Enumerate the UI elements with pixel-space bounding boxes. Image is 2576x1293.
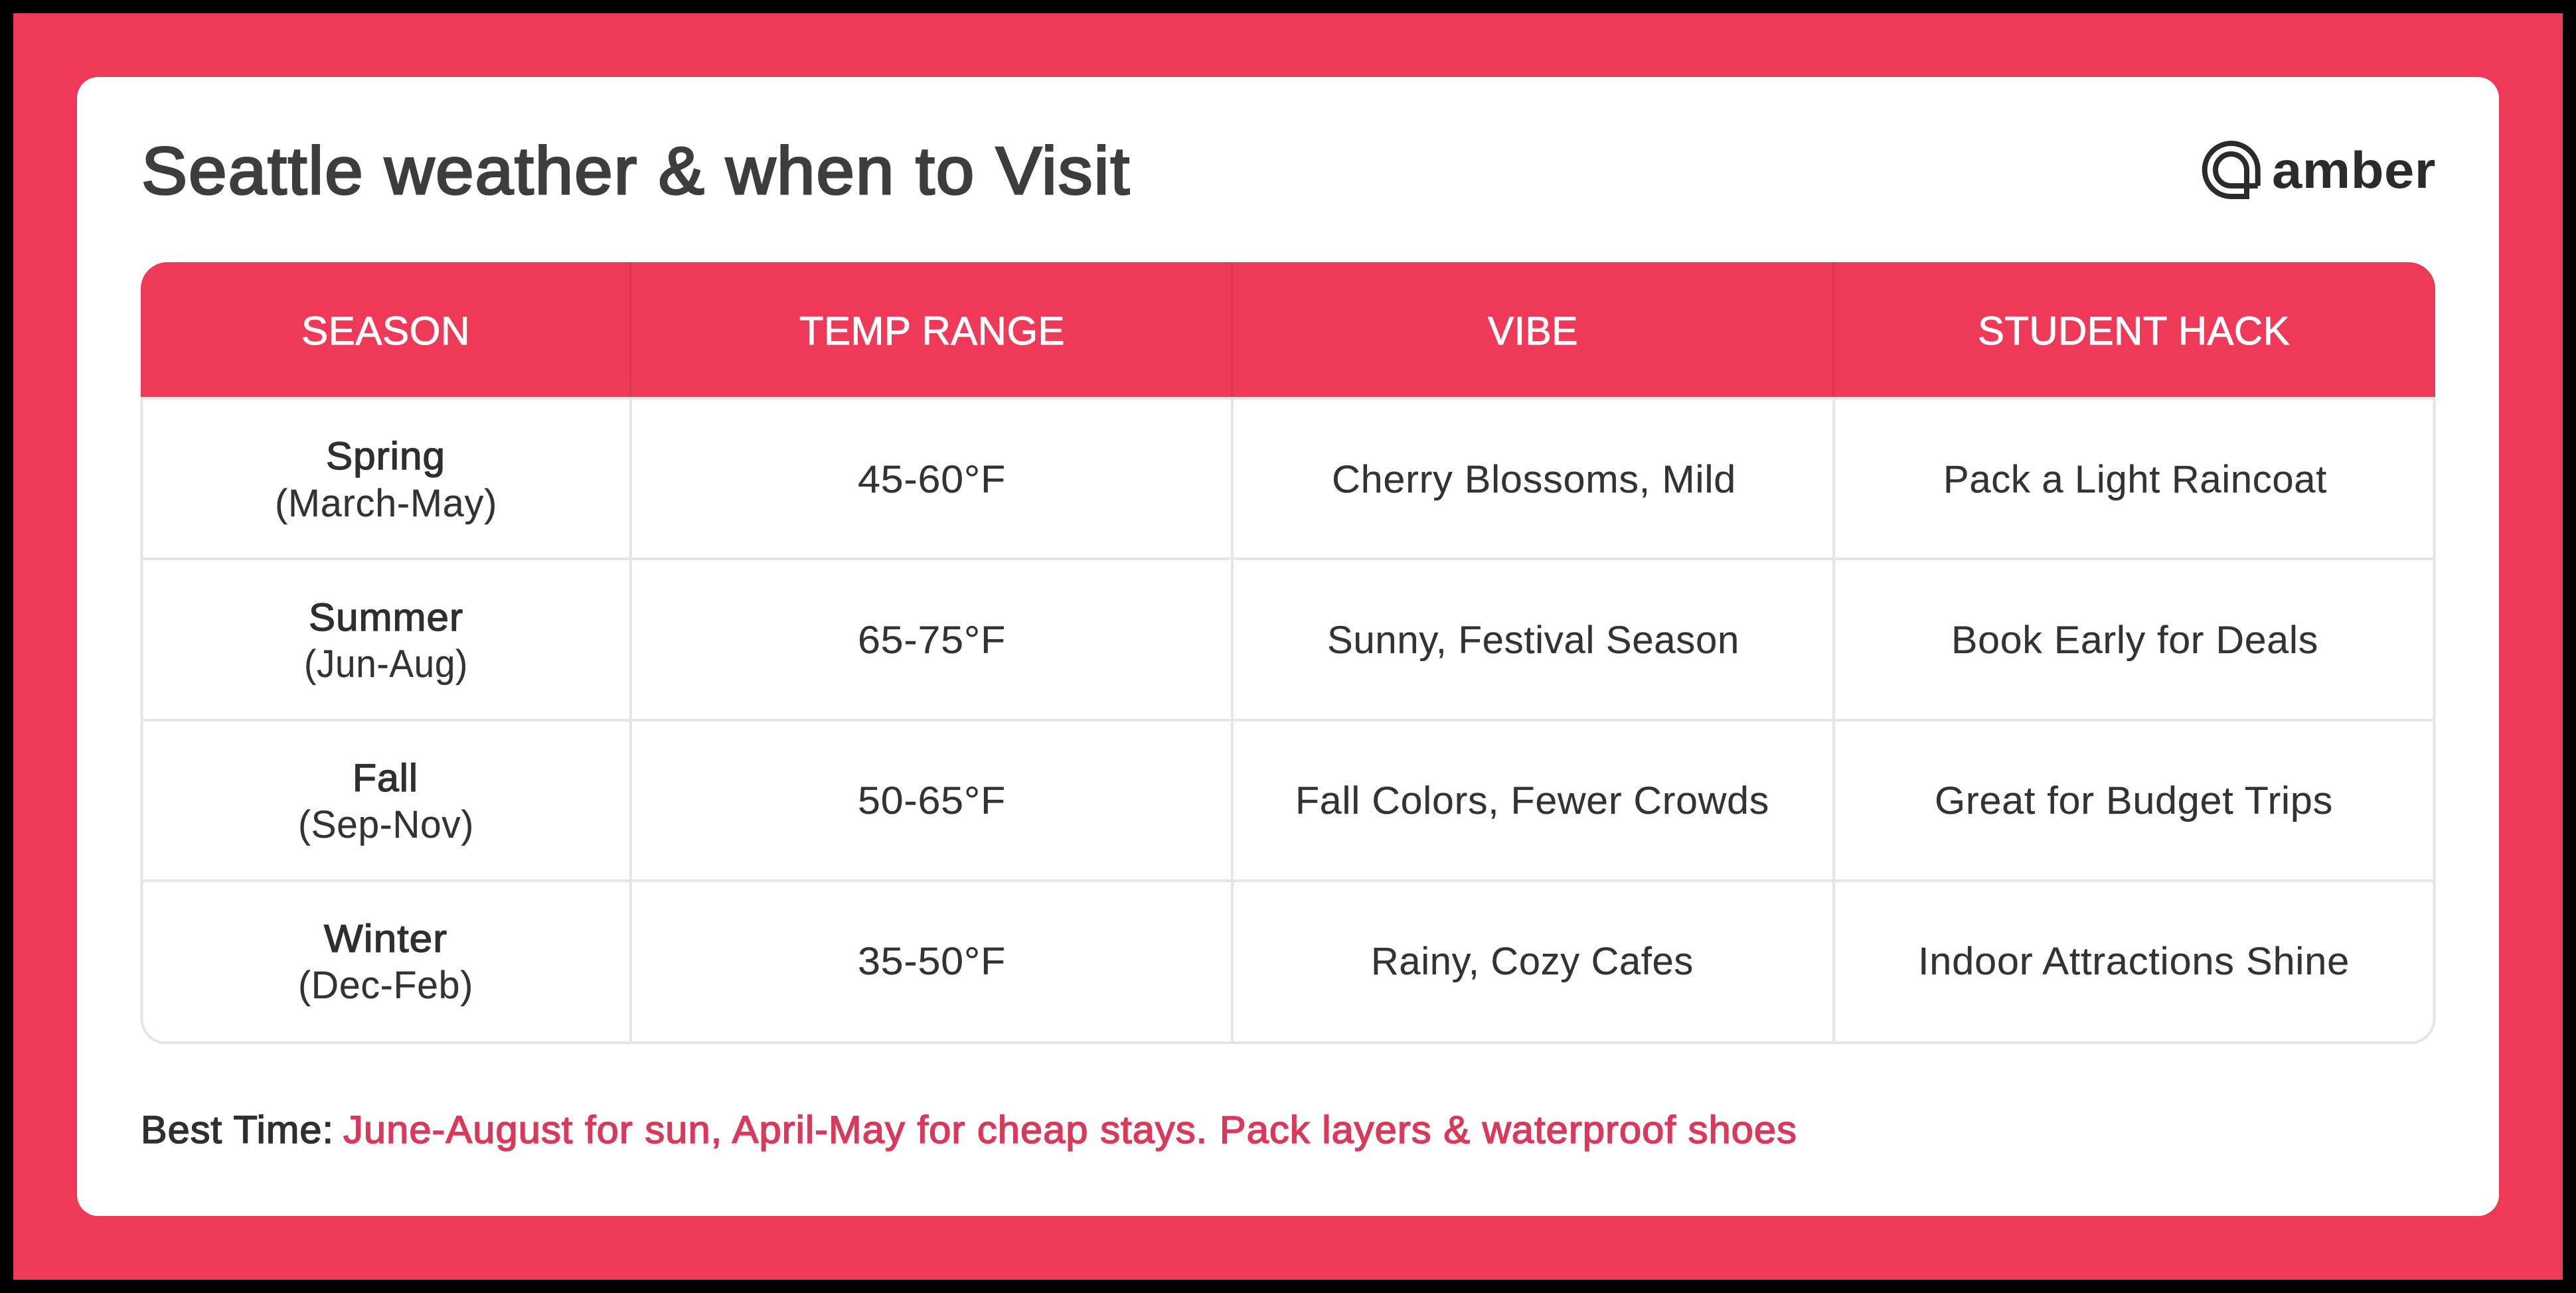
logo: amber xyxy=(2205,141,2436,199)
header: temp range: TEMP RANGE xyxy=(799,309,1065,353)
table xyxy=(141,262,2435,1043)
fall student hack: Great for Budget Trips xyxy=(1935,779,2333,822)
row: spring: (March-May) xyxy=(275,482,497,525)
footer note xyxy=(141,1108,1797,1152)
title: Seattle weather & when to Visit xyxy=(141,134,1131,208)
header: season: SEASON xyxy=(301,309,470,353)
summer vibe: Sunny, Festival Season xyxy=(1327,619,1739,662)
row: summer xyxy=(304,596,2318,686)
fall season: Fall xyxy=(353,757,418,800)
fall vibe: Fall Colors, Fewer Crowds xyxy=(1295,779,1769,822)
table header band xyxy=(141,262,2435,397)
summer season: Summer xyxy=(309,596,463,639)
logo wordmark: amber xyxy=(2272,141,2436,199)
header: student hack: STUDENT HACK xyxy=(1978,309,2290,353)
row: winter xyxy=(298,917,2350,1007)
fall temperature: 50-65°F xyxy=(858,779,1006,822)
spring student hack: Pack a Light Raincoat xyxy=(1943,458,2327,501)
icon: amber teardrop mark xyxy=(2205,143,2258,196)
winter temperature: 35-50°F xyxy=(858,940,1006,983)
spring temperature: 45-60°F xyxy=(858,458,1006,501)
winter vibe: Rainy, Cozy Cafes xyxy=(1371,940,1694,983)
header: vibe: VIBE xyxy=(1488,309,1578,353)
winter student hack: Indoor Attractions Shine xyxy=(1918,940,2350,983)
row: spring xyxy=(275,435,2327,525)
best time label: Best Time: xyxy=(141,1108,334,1152)
spring season: Spring xyxy=(326,435,445,478)
summer temperature: 65-75°F xyxy=(858,619,1006,662)
row: summer: (Jun-Aug) xyxy=(304,643,468,686)
row: winter: (Dec-Feb) xyxy=(298,964,473,1007)
best time detail: June-August for sun, April-May for cheap stays. Pack layers & waterproof shoes xyxy=(343,1108,1797,1152)
summer student hack: Book Early for Deals xyxy=(1951,619,2318,662)
row: fall xyxy=(298,757,2333,846)
row: fall: (Sep-Nov) xyxy=(298,803,474,846)
winter season: Winter xyxy=(324,917,447,960)
spring vibe: Cherry Blossoms, Mild xyxy=(1332,458,1736,501)
table body outline xyxy=(142,372,2434,1043)
